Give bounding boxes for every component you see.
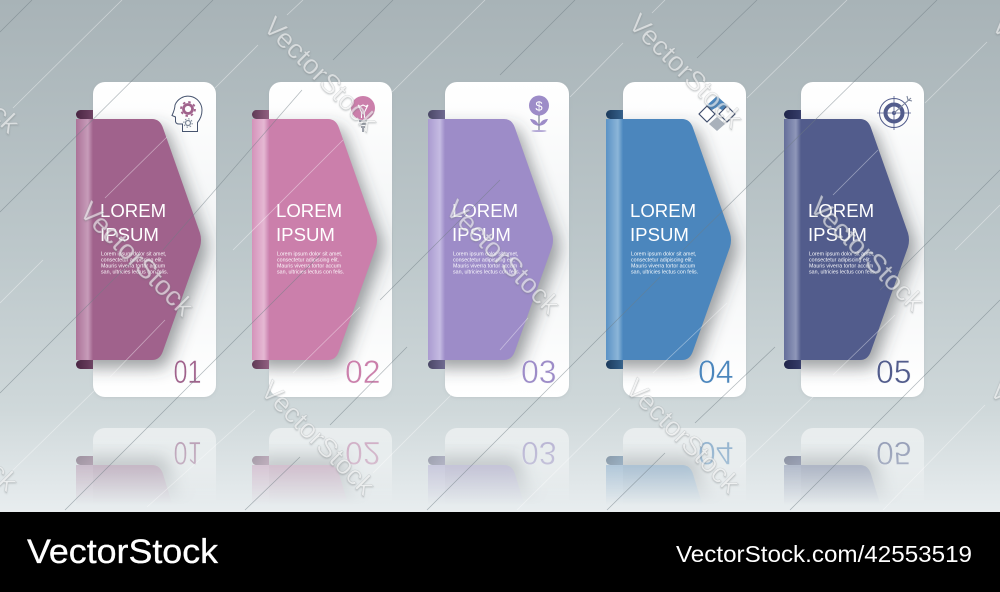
- text block: step 4: consectetur adipiscing elit.: [631, 258, 693, 264]
- icon: puzzle: [699, 96, 735, 131]
- panel: step 3: [428, 82, 569, 397]
- arrow: step 4: [606, 119, 731, 360]
- number: step 5: 05: [876, 354, 912, 390]
- reflection of the five panels: 01: [174, 435, 202, 471]
- text block: step 4: Mauris viverra tortor accum: [631, 264, 696, 270]
- number: step 1: 01: [174, 354, 202, 390]
- arrow: step 3: [428, 119, 553, 360]
- heading: step 3: IPSUM: [452, 224, 511, 245]
- watermark: VectorStock: [623, 8, 749, 134]
- footer bar: [0, 512, 1000, 592]
- watermark: VectorStock: [804, 191, 930, 317]
- heading: step 3: LOREM: [452, 200, 518, 221]
- text block: step 1: Mauris viverra tortor accum: [101, 264, 166, 270]
- text block: step 3: consectetur adipiscing elit.: [453, 258, 515, 264]
- heading: step 4: LOREM: [630, 200, 696, 221]
- number: step 3: 03: [521, 354, 557, 390]
- heading: step 5: LOREM: [808, 200, 874, 221]
- reflection of the five panels: 03: [521, 435, 557, 471]
- heading: step 2: IPSUM: [276, 224, 335, 245]
- reflection of the five panels: 04: [698, 435, 734, 471]
- text block: step 2: Lorem ipsum dolor sit amet,: [277, 252, 342, 258]
- text block: step 5: Mauris viverra tortor accum: [809, 264, 874, 270]
- reflection of the five panels: 05: [876, 435, 912, 471]
- text block: step 3: Lorem ipsum dolor sit amet,: [453, 252, 518, 258]
- watermark: VectorStock: [258, 11, 384, 137]
- watermark: VectorStock: [74, 196, 200, 322]
- icon: light bulb: [351, 96, 375, 132]
- heading: step 2: LOREM: [276, 200, 342, 221]
- reflection of the five panels: 02: [345, 435, 381, 471]
- text block: step 1: Lorem ipsum dolor sit amet,: [101, 252, 166, 258]
- panel: step 2: [252, 82, 392, 397]
- watermark: VectorStock: [620, 373, 746, 499]
- icon: dollar plant: [529, 96, 549, 132]
- text block: step 1: san, ultricies lectus con felis.: [101, 270, 168, 276]
- text block: step 3: Mauris viverra tortor accum: [453, 264, 518, 270]
- watermark: VectorStock: [440, 194, 566, 320]
- icon: dollar plant: $: [535, 98, 543, 114]
- number: step 4: 04: [698, 354, 734, 390]
- panel: step 4: [606, 82, 746, 397]
- footer logo: VectorStock: [27, 533, 219, 571]
- text block: step 5: consectetur adipiscing elit.: [809, 258, 871, 264]
- text block: step 2: consectetur adipiscing elit.: [277, 258, 339, 264]
- arrow: step 2: [252, 119, 377, 360]
- number: step 2: 02: [345, 354, 381, 390]
- text block: step 5: san, ultricies lectus con felis.: [809, 270, 876, 276]
- reflection of the five panels: [76, 428, 924, 499]
- footer image id: VectorStock.com/42553519: [676, 541, 972, 567]
- text block: step 3: san, ultricies lectus con felis.: [453, 270, 520, 276]
- panel: step 5: [784, 82, 924, 397]
- icon: target: [877, 96, 912, 130]
- text block: step 1: consectetur adipiscing elit.: [101, 258, 163, 264]
- text block: step 4: san, ultricies lectus con felis.: [631, 270, 698, 276]
- heading: step 1: IPSUM: [100, 224, 159, 245]
- text block: step 2: Mauris viverra tortor accum: [277, 264, 342, 270]
- heading: step 1: LOREM: [100, 200, 166, 221]
- panel: step 1: [76, 82, 216, 397]
- text block: step 4: Lorem ipsum dolor sit amet,: [631, 252, 696, 258]
- text block: step 5: Lorem ipsum dolor sit amet,: [809, 252, 874, 258]
- heading: step 4: IPSUM: [630, 224, 689, 245]
- arrow: step 5: [784, 119, 909, 360]
- watermark: VectorStock: [255, 375, 381, 501]
- icon: head with gears: [172, 96, 202, 132]
- arrow: step 1: [76, 119, 201, 360]
- text block: step 2: san, ultricies lectus con felis.: [277, 270, 344, 276]
- heading: step 5: IPSUM: [808, 224, 867, 245]
